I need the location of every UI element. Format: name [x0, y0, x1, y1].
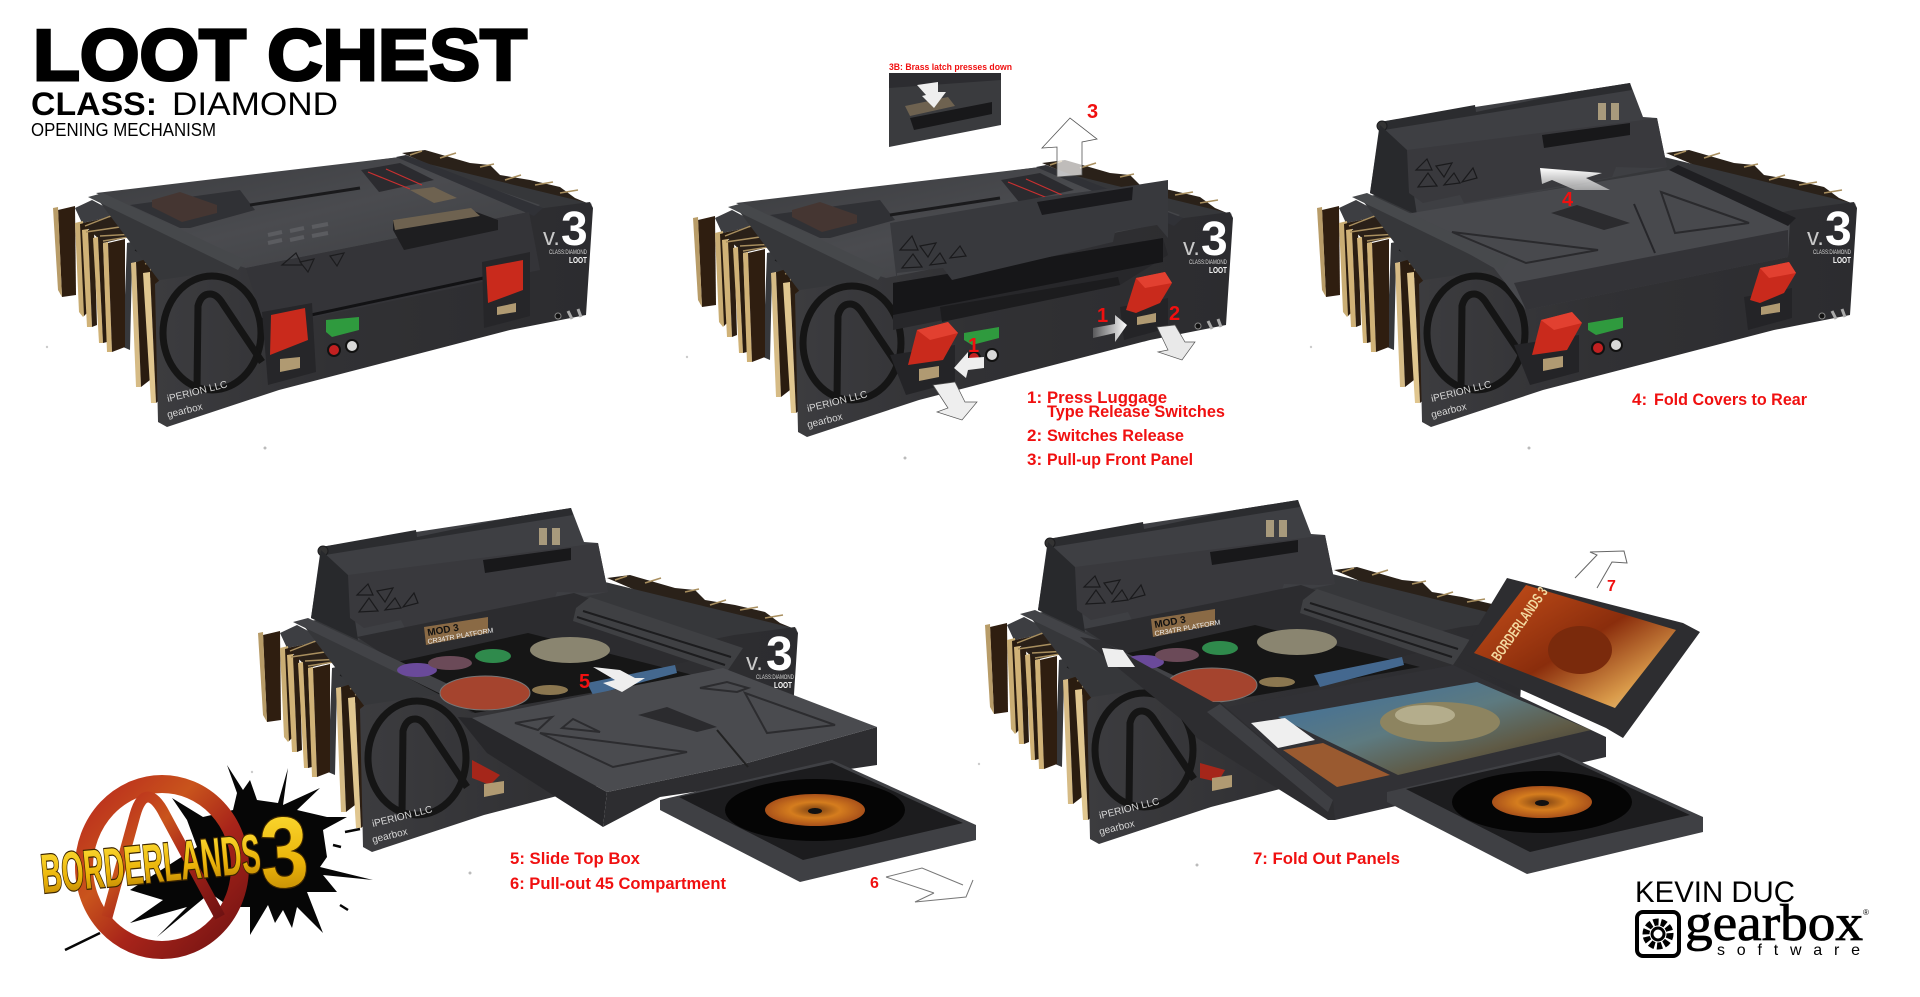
inset: brass latch detail: 3B: Brass latch presses down [889, 62, 1012, 72]
label: step 4: Fold Covers to Rear [1654, 390, 1807, 409]
arrow: fold panel left [1102, 648, 1135, 667]
panel: chest step 4 covers folded: v. [1807, 224, 1824, 251]
panel: chest step 4 covers folded: iPERION LLC [1430, 379, 1493, 405]
panel: chest step 1-3 front panel lifted: v. [1183, 234, 1200, 261]
arrow: switch release left [933, 382, 977, 420]
text block: steps 1-3 [1027, 388, 1225, 469]
logo: gearbox software [1637, 895, 1869, 959]
text block: steps 5-6 [510, 849, 726, 893]
text block: steps 5-6: 5: Slide Top Box [510, 849, 641, 868]
arrow: switch release right: 2 [1169, 303, 1180, 325]
panel: chest step 7 fold out panels: MOD 3 [1154, 615, 1187, 631]
logo: Borderlands 3: 3 [257, 796, 311, 910]
panel: chest closed: v. [543, 224, 560, 251]
panel: chest step 5-6 slide box: LOOT [774, 680, 793, 690]
panel: chest step 5-6 slide box: v. [746, 649, 763, 676]
panel: chest step 1-3 front panel lifted [686, 160, 1233, 460]
text block: steps 5-6: 6: Pull-out 45 Compartment [510, 874, 726, 893]
panel: chest closed: iPERION LLC [166, 379, 229, 405]
arrow: slide top box: 5 [579, 671, 590, 693]
text block: steps 1-3: Type Release Switches [1047, 402, 1225, 421]
arrow: switch release right [1157, 303, 1195, 360]
arrow: press switch right [1093, 305, 1127, 342]
panel: chest step 5-6 slide box: gearbox [371, 826, 409, 846]
text block: steps 1-3: Pull-up Front Panel [1047, 450, 1193, 469]
subtitle: class: DIAMOND [172, 86, 338, 122]
arrow: press switch left: 1 [968, 335, 979, 357]
panel: chest closed: gearbox [166, 401, 204, 421]
logo: gearbox software: software [1717, 942, 1860, 959]
arrow: fold covers to rear: 4 [1562, 189, 1574, 211]
arrow: pull up front panel: 3 [1087, 101, 1098, 123]
subtitle: class [31, 86, 338, 122]
panel: chest step 1-3 front panel lifted: LOOT [1209, 265, 1228, 275]
text block: steps 1-3: 3: [1027, 450, 1042, 469]
arrow: slide top box [579, 667, 645, 693]
subheading: opening mechanism: OPENING MECHANISM [31, 120, 216, 140]
arrow: pull-out compartment [870, 868, 973, 902]
arrow: press switch right: 1 [1097, 305, 1108, 327]
text block: steps 1-3: 2: [1027, 426, 1042, 445]
panel: chest step 1-3 front panel lifted: CLASS:DIAMOND [1189, 259, 1227, 266]
text block: steps 1-3: Press Luggage [1047, 388, 1167, 407]
arrow: fold out panel: 7 [1607, 578, 1616, 595]
panel: chest step 4 covers folded: 3 [1825, 203, 1852, 256]
panel: chest step 7 fold out panels: gearbox [1098, 818, 1136, 838]
panel: chest step 5-6 slide box: MOD 3 [427, 623, 460, 639]
arrow: pull-out compartment: 6 [870, 875, 879, 892]
logo: Borderlands 3: BORDERLANDS [38, 822, 263, 905]
panel: chest step 5-6 slide box [251, 508, 976, 882]
panel: chest step 1-3 front panel lifted: gearbox [806, 411, 844, 431]
panel: chest step 7 fold out panels [978, 500, 1703, 874]
arrow: fold out panel [1575, 551, 1627, 595]
panel: chest closed: 3 [561, 203, 588, 256]
panel: chest closed: CLASS:DIAMOND [549, 249, 587, 256]
panel: chest closed: LOOT [569, 255, 588, 265]
subtitle: class: CLASS: [31, 86, 157, 122]
arrow: fold covers to rear [1540, 168, 1610, 211]
panel: chest step 4 covers folded: gearbox [1430, 401, 1468, 421]
panel: chest step 4 covers folded: LOOT [1833, 255, 1852, 265]
arrow: press switch left [954, 335, 984, 378]
panel: chest step 5-6 slide box: CLASS:DIAMOND [756, 674, 794, 681]
panel: chest step 1-3 front panel lifted: iPERION LLC [806, 389, 869, 415]
panel: chest step 4 covers folded: CLASS:DIAMOND [1813, 249, 1851, 256]
label: step 4: 4: [1632, 390, 1647, 409]
panel: chest step 5-6 slide box: iPERION LLC [371, 804, 434, 830]
panel: chest step 4 covers folded [1310, 83, 1857, 450]
panel: chest step 5-6 slide box: CR34TR PLATFORM [427, 627, 494, 646]
panel: chest step 7 fold out panels: iPERION LLC [1098, 796, 1161, 822]
panel: chest step 1-3 front panel lifted: 3 [1201, 213, 1228, 266]
label: step 7: 7: Fold Out Panels [1253, 849, 1400, 868]
logo: gearbox software: ® [1863, 908, 1869, 917]
text block: steps 1-3: 1: [1027, 388, 1042, 407]
panel: chest step 5-6 slide box: 3 [766, 628, 793, 681]
panel: chest step 7 fold out panels: CR34TR PLATFORM [1154, 619, 1221, 638]
logo: Borderlands 3 [38, 765, 373, 950]
panel: chest step 7 fold out panels: BORDERLANDS 3 [1488, 584, 1552, 664]
arrow: pull up front panel [1042, 101, 1098, 177]
text block: steps 1-3: Switches Release [1047, 426, 1184, 445]
title: LOOT CHEST [33, 16, 527, 96]
credit: artist name: KEVIN DUC [1635, 876, 1795, 909]
panel: chest closed [46, 150, 593, 450]
logo: gearbox software: gearbox [1685, 895, 1863, 952]
inset: brass latch detail [889, 62, 1012, 147]
